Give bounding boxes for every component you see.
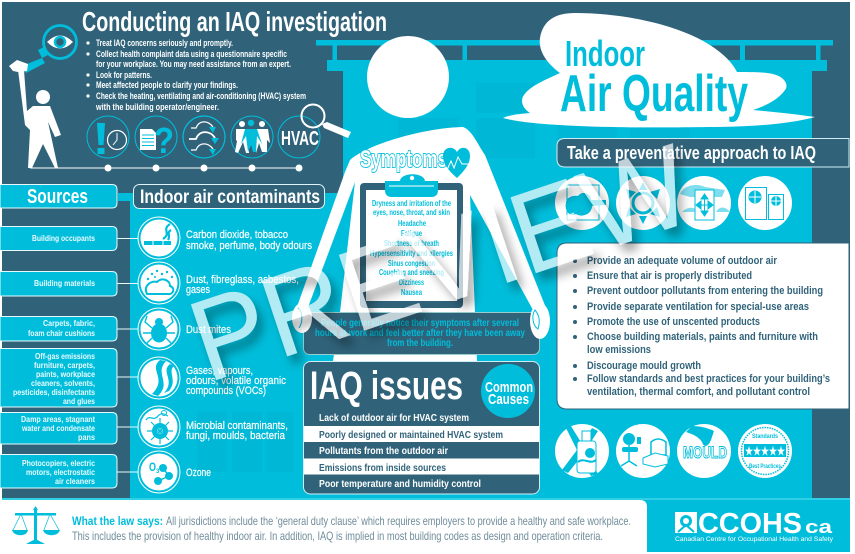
panel: preventative actions list: Ensure that air is properly distributed	[587, 270, 752, 282]
building illustration	[130, 40, 833, 499]
header: Sources: Sources	[27, 186, 88, 208]
contaminants list: Ozone	[186, 467, 211, 479]
icon: cigarette	[138, 217, 180, 259]
source: off-gas emissions: Off-gas emissions	[35, 352, 96, 361]
icon: ozone molecule	[138, 451, 180, 493]
source: off-gas emissions: paints, workplace	[36, 370, 96, 379]
central person figure	[293, 36, 550, 361]
icon: dust cloud	[138, 262, 180, 304]
panel: preventative actions list: low emissions	[587, 344, 651, 356]
investigation steps text: Treat IAQ concerns seriously and promptly.	[96, 38, 233, 48]
callout: symptom timing: hours at work and feel better after they have been away	[315, 328, 525, 339]
footer cyan strip	[2, 498, 850, 500]
source: photocopiers: Photocopiers, electric	[22, 459, 96, 468]
header: Indoor air contaminants: Indoor air contaminants	[140, 186, 320, 208]
clipboard with symptoms: Hypersensitivity and allergies	[370, 249, 453, 258]
heading: Symptoms: Symptoms	[360, 146, 447, 173]
investigation steps text	[86, 38, 306, 112]
title cloud: Indoor Air Quality	[503, 13, 815, 127]
contaminants list: Gases, vapours,	[186, 365, 253, 377]
contaminants list: odours, volatile organic	[186, 375, 286, 387]
panel: preventative actions list	[557, 243, 849, 409]
source: building occupants	[0, 226, 138, 250]
source: carpets	[0, 316, 138, 341]
panel: preventative actions list: Discourage mould growth	[587, 360, 701, 372]
source: off-gas emissions: cleaners, solvents,	[31, 379, 95, 388]
icon: ozone molecule: 3	[156, 469, 160, 475]
contaminants list: Dust, fibreglass, asbestos,	[186, 274, 299, 286]
callout: symptom timing: from the building.	[387, 338, 453, 349]
clipboard with symptoms: Dryness and irritation of the	[372, 199, 451, 208]
icon: distributed air arrows	[616, 176, 670, 230]
source: building materials: Building materials	[34, 279, 96, 288]
icon: no scented products	[555, 424, 609, 478]
icon: outdoor air through window	[555, 176, 609, 230]
contaminants list: Carbon dioxide, tobacco	[186, 229, 288, 241]
badge: Common Causes	[481, 364, 535, 418]
icon: microbe	[138, 406, 180, 448]
contaminants list: Microbial contaminants,	[186, 420, 288, 432]
icon: three people	[231, 116, 273, 158]
icon: building in clouds	[677, 176, 731, 230]
source: photocopiers: motors, electrostatic	[26, 468, 96, 477]
panel: what the law says: This includes the provision of healthy indoor air. In addition, IAQ is implied in most building codes as design and operation criteria.	[72, 529, 603, 543]
icon: chair, paint and bricks	[616, 424, 670, 478]
callout: symptom timing	[304, 312, 540, 354]
source: building materials	[0, 272, 138, 296]
header: Sources	[0, 184, 117, 208]
panel: preventative actions list: Promote the use of unscented products	[587, 316, 760, 328]
source: building occupants: Building occupants	[32, 234, 96, 243]
source: damp areas: pans	[78, 433, 96, 442]
icon: ozone molecule: O	[149, 460, 156, 474]
icon: standards badge: Standards	[752, 433, 778, 440]
contaminants list: compounds (VOCs)	[186, 385, 266, 397]
contaminants list: smoke, perfume, body odours	[186, 240, 312, 252]
contaminants list	[186, 229, 312, 479]
clipboard with symptoms: Nausea	[401, 288, 422, 297]
title: Conducting an IAQ investigation: Conducting an IAQ investigation	[82, 6, 387, 37]
hands of the central figure	[292, 303, 550, 339]
source: damp areas: water and condensate	[21, 424, 96, 433]
clipboard with symptoms: eyes, nose, throat, and skin	[373, 208, 450, 217]
logo: CCOHS	[675, 508, 834, 543]
logo: CCOHS: CCOHS	[698, 508, 802, 540]
source: carpets: foam chair cushions	[28, 329, 96, 338]
icon: discourage mould	[677, 424, 731, 478]
logo: CCOHS: ca	[805, 517, 833, 537]
clipboard with symptoms: Fatigue	[401, 229, 422, 238]
clipboard with symptoms: Sinus congestion	[388, 259, 435, 268]
panel: preventative actions list: ventilation, thermal comfort, and pollutant control	[587, 386, 810, 398]
source: photocopiers	[0, 454, 138, 488]
investigation steps text: with the building operator/engineer.	[95, 102, 219, 112]
source: damp areas	[0, 412, 138, 444]
investigation steps text: Check the heating, ventilating and air-conditioning (HVAC) system	[96, 91, 306, 101]
source: off-gas emissions: furniture, carpets,	[34, 361, 95, 370]
source: damp areas: Damp areas, stagnant	[21, 415, 95, 424]
icon: HVAC with magnifier	[278, 104, 351, 158]
panel: IAQ issues: Poorly designed or maintained HVAC system	[319, 430, 503, 441]
title cloud: Indoor Air Quality: Air Quality	[560, 65, 748, 123]
panel: what the law says	[2, 500, 647, 552]
panel: preventative actions list: Choose building materials, paints and furniture with	[587, 331, 818, 343]
sources list	[0, 226, 138, 488]
source: off-gas emissions: pesticides, disinfectants	[13, 388, 96, 397]
icon: standards badge: Best Practices	[749, 464, 782, 470]
header link	[118, 193, 134, 201]
investigation steps text: Look for patterns.	[96, 70, 152, 80]
clipboard with symptoms: Shortness of breath	[384, 239, 439, 248]
panel: what the law says: What the law says:	[72, 514, 163, 528]
source: off-gas emissions	[0, 348, 138, 407]
clipboard with symptoms: Coughing and sneezing	[379, 268, 444, 277]
icon: vapours	[138, 357, 180, 399]
contaminants list: fungi, moulds, bacteria	[186, 430, 286, 442]
panel: IAQ issues: Poor temperature and humidity control	[319, 479, 481, 490]
panel: IAQ issues: Emissions from inside sources	[319, 463, 446, 474]
callout: symptom timing: People generally notice their symptoms after several	[321, 318, 519, 329]
source: photocopiers: air cleaners	[55, 477, 96, 486]
badge: Common Causes: Common	[485, 379, 533, 396]
icon: document and question mark: ?	[154, 120, 174, 161]
timeline	[30, 164, 302, 172]
icon: standards badge	[738, 424, 792, 478]
panel: logo background	[640, 500, 850, 552]
investigation steps text: for your workplace. You may need assistance from an expert.	[96, 59, 291, 69]
source: off-gas emissions: and glues	[63, 397, 96, 406]
icon: investigator with magnifying glass	[9, 26, 76, 168]
investigation steps text: Meet affected people to clarify your findings.	[96, 80, 238, 90]
panel: IAQ issues: Lack of outdoor air for HVAC system	[319, 413, 469, 424]
panel: IAQ issues	[304, 362, 540, 494]
panel: IAQ issues: IAQ issues	[310, 364, 463, 408]
source: carpets: Carpets, fabric,	[43, 319, 95, 328]
clipboard with symptoms: Dizziness	[399, 278, 424, 287]
icon: discourage mould: MOULD	[683, 443, 727, 462]
badge: Common Causes: Causes	[488, 391, 529, 408]
panel: preventative actions list: Provide separate ventilation for special-use areas	[587, 301, 809, 313]
icon: scales of justice	[12, 506, 60, 544]
icon: ventilation fans	[738, 176, 792, 230]
title cloud: Indoor Air Quality: Indoor	[565, 33, 645, 74]
investigation steps text: Collect health complaint data using a questionnaire specific	[96, 49, 287, 59]
logo: CCOHS: Canadian Centre for Occupational Health and Safety	[675, 536, 834, 543]
icon: heart with pulse	[443, 148, 479, 178]
panel: what the law says: All jurisdictions include the ‘general duty clause’ which requires employers to provide a healthy and safe workplace.	[166, 514, 631, 528]
contaminants list: gases	[186, 284, 210, 296]
watermark: PREVIEW: PREVIEW	[174, 119, 707, 407]
icon: dust mite	[138, 308, 180, 350]
clipboard with symptoms	[360, 174, 463, 308]
icon: alert and clock	[87, 116, 129, 158]
clipboard with symptoms: Headache	[398, 219, 426, 228]
panel: IAQ issues: Pollutants from the outdoor air	[319, 446, 448, 457]
contaminants list: Dust mites	[186, 324, 231, 336]
icon: airflow arrows	[183, 116, 225, 158]
icon: HVAC with magnifier: HVAC	[281, 128, 319, 150]
icon: standards badge: ★★★★★	[745, 445, 786, 458]
icon: document and question mark	[135, 116, 177, 161]
panel: preventative actions list: Provide an adequate volume of outdoor air	[587, 255, 778, 267]
